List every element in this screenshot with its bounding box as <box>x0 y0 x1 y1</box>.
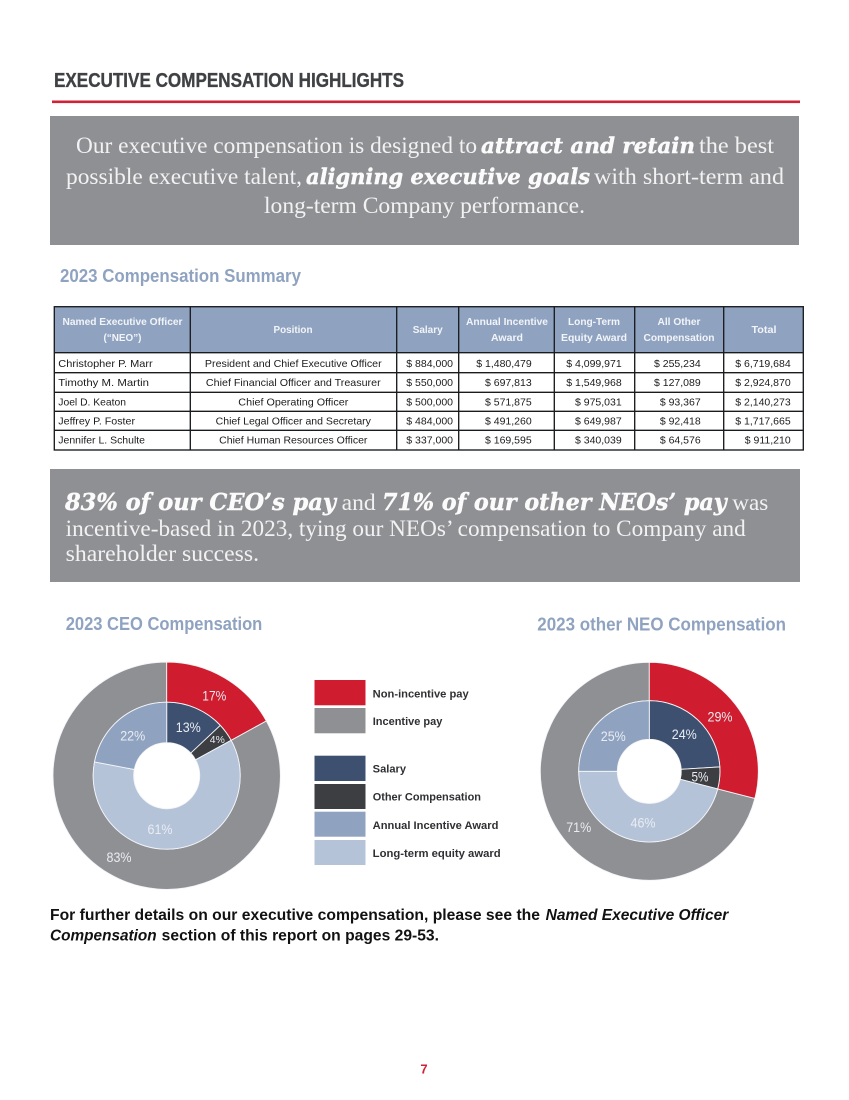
table header row: Long-Term <box>568 317 620 328</box>
NEO inner ring: annual incentive award 25% <box>579 701 649 771</box>
table row: Joel D. Keaton <box>58 396 791 408</box>
table row: Timothy M. Martin: $ 697,813 <box>485 377 532 389</box>
heading: CEO compensation: 2023 CEO Compensation <box>66 614 262 634</box>
table row: Jeffrey P. Foster: $ 484,000 <box>406 416 453 428</box>
table header row: Position <box>274 325 312 336</box>
legend: incentive pay: Incentive pay <box>373 716 443 728</box>
table row: Timothy M. Martin: $ 127,089 <box>654 377 701 389</box>
legend: non-incentive pay: Non-incentive pay <box>373 688 470 700</box>
banner: compensation philosophy: the best <box>699 133 775 158</box>
donut chart: CEO compensation <box>53 662 280 889</box>
footnote text <box>50 907 729 945</box>
CEO percentage labels: 83% <box>106 850 132 865</box>
footnote text: Compensation <box>50 928 157 945</box>
NEO inner ring: other compensation 5% <box>680 767 720 789</box>
NEO inner ring: long-term equity award 46% <box>579 771 718 842</box>
heading: other NEO compensation: 2023 other NEO Compensation <box>537 615 786 635</box>
table header row: Total <box>752 325 777 336</box>
table row: Christopher P. Marr <box>58 358 791 370</box>
table row: Christopher P. Marr: $ 6,719,684 <box>735 358 791 370</box>
table row: Jeffrey P. Foster <box>58 416 791 428</box>
table row: Timothy M. Martin: Chief Financial Officer and Treasurer <box>206 377 381 389</box>
table row: Jeffrey P. Foster: $ 491,260 <box>485 416 532 428</box>
table row: Christopher P. Marr: $ 4,099,971 <box>566 358 622 370</box>
table row: Jeffrey P. Foster: Chief Legal Officer and Secretary <box>216 416 372 428</box>
legend: non-incentive pay <box>314 680 470 705</box>
NEO percentage labels: 24% <box>672 727 697 742</box>
CEO inner ring: other compensation 4% <box>191 725 231 760</box>
donut chart: other NEO compensation <box>540 662 758 880</box>
banner: compensation philosophy: possible executive talent, <box>66 164 302 189</box>
banner: incentive-based pay: was <box>732 490 768 515</box>
CEO inner ring: annual incentive award 22% <box>94 702 167 770</box>
legend: salary: Salary <box>373 764 407 776</box>
page title: EXECUTIVE COMPENSATION HIGHLIGHTS <box>54 70 404 92</box>
CEO inner ring: long-term equity award 61% <box>93 740 240 849</box>
table row: Christopher P. Marr: President and Chief Executive Officer <box>205 358 382 370</box>
banner: compensation philosophy <box>50 116 799 245</box>
banner: incentive-based pay <box>50 469 800 582</box>
NEO outer ring: non-incentive pay 29% <box>649 662 758 798</box>
CEO percentage labels: 22% <box>120 728 145 744</box>
footnote text: section of this report on pages 29-53. <box>162 928 439 945</box>
table row: Joel D. Keaton: Chief Operating Officer <box>238 396 349 408</box>
CEO percentage labels: 61% <box>148 822 172 837</box>
table row: Jeffrey P. Foster: $ 92,418 <box>660 416 701 428</box>
CEO percentage labels: 13% <box>176 720 201 735</box>
legend: salary <box>314 756 407 781</box>
table header row: Award <box>491 333 523 344</box>
NEO inner ring: salary 24% <box>649 701 720 769</box>
heading: 2023 compensation summary: 2023 Compensation Summary <box>60 266 301 286</box>
table header row: Salary <box>413 325 443 336</box>
table row: Jeffrey P. Foster: Jeffrey P. Foster <box>58 416 136 428</box>
table header row: Annual Incentive <box>466 317 548 328</box>
NEO outer ring: incentive pay 71% <box>540 662 755 880</box>
table row: Joel D. Keaton: $ 571,875 <box>485 396 532 408</box>
table row: Christopher P. Marr: $ 1,480,479 <box>476 358 532 370</box>
table row: Timothy M. Martin: $ 2,924,870 <box>735 377 791 389</box>
footnote text: For further details on our executive compensation, please see the <box>50 907 540 924</box>
CEO inner ring: salary 13% <box>167 702 220 753</box>
table row: Jeffrey P. Foster: $ 1,717,665 <box>735 416 791 428</box>
table row: Timothy M. Martin: Timothy M. Martin <box>58 377 149 389</box>
table row: Joel D. Keaton: $ 500,000 <box>406 396 453 408</box>
table row: Joel D. Keaton: Joel D. Keaton <box>58 396 126 408</box>
legend: annual incentive award: Annual Incentive Award <box>373 820 498 832</box>
NEO percentage labels: 46% <box>630 816 656 830</box>
banner: incentive-based pay: and <box>342 490 376 515</box>
table row: Jennifer L. Schulte <box>58 434 791 446</box>
CEO percentage labels: 4% <box>210 734 225 746</box>
table header row: Named Executive Officer <box>62 317 183 328</box>
table row: Jennifer L. Schulte: $ 64,576 <box>660 434 701 446</box>
table row: Timothy M. Martin: $ 1,549,968 <box>566 377 622 389</box>
NEO percentage labels <box>566 710 732 835</box>
NEO percentage labels: 5% <box>692 770 708 784</box>
table row: Joel D. Keaton: $ 975,031 <box>575 396 622 408</box>
table row: Timothy M. Martin: $ 550,000 <box>406 377 453 389</box>
banner: compensation philosophy: attract and retain <box>481 133 695 158</box>
table row: Jennifer L. Schulte: $ 911,210 <box>745 434 791 446</box>
table row: Joel D. Keaton: $ 93,367 <box>660 396 701 408</box>
legend: incentive pay <box>314 708 443 733</box>
table row: Jennifer L. Schulte: Jennifer L. Schulte <box>58 434 145 446</box>
table header row: Compensation <box>644 333 714 344</box>
CEO percentage labels: 17% <box>202 688 226 704</box>
table row: Jeffrey P. Foster: $ 649,987 <box>575 416 622 428</box>
compensation summary table <box>54 306 804 450</box>
table header row: (“NEO”) <box>104 333 142 344</box>
CEO percentage labels <box>106 688 226 865</box>
banner: compensation philosophy: with short-term and <box>594 164 785 189</box>
table header row <box>54 306 804 352</box>
red title rule <box>52 100 800 103</box>
legend: long-term equity award: Long-term equity award <box>373 848 501 860</box>
table row: Christopher P. Marr: $ 884,000 <box>406 358 453 370</box>
table header row: Equity Award <box>561 333 627 344</box>
page number: 7 <box>420 1061 428 1076</box>
table row: Jennifer L. Schulte: $ 169,595 <box>485 434 532 446</box>
table row: Jennifer L. Schulte: Chief Human Resources Officer <box>219 434 368 446</box>
banner: incentive-based pay: shareholder success. <box>66 541 259 566</box>
NEO percentage labels: 25% <box>601 729 626 744</box>
CEO outer ring: incentive pay 83% <box>53 662 280 889</box>
legend: long-term equity award <box>314 840 501 865</box>
table row: Christopher P. Marr: Christopher P. Marr <box>58 358 153 370</box>
table row: Jennifer L. Schulte: $ 337,000 <box>406 434 453 446</box>
legend: other compensation <box>314 784 481 809</box>
banner: incentive-based pay: incentive-based in 2023, tying our NEOs’ compensation to Company and <box>66 516 746 541</box>
table row: Christopher P. Marr: $ 255,234 <box>654 358 701 370</box>
banner: incentive-based pay: 83% of our CEO’s pay <box>64 489 338 516</box>
banner: incentive-based pay: 71% of our other NEOs’ pay <box>382 489 728 516</box>
table row: Jennifer L. Schulte: $ 340,039 <box>575 434 622 446</box>
table header row: All Other <box>658 317 701 328</box>
legend: other compensation: Other Compensation <box>373 792 481 804</box>
banner: compensation philosophy: Our executive compensation is designed to <box>76 133 477 158</box>
table row: Timothy M. Martin <box>58 377 791 389</box>
table row: Joel D. Keaton: $ 2,140,273 <box>735 396 791 408</box>
CEO outer ring: non-incentive pay 17% <box>167 662 266 740</box>
NEO percentage labels: 71% <box>566 820 591 835</box>
banner: compensation philosophy: long-term Company performance. <box>264 193 585 218</box>
legend <box>314 680 501 865</box>
footnote text: Named Executive Officer <box>546 907 729 924</box>
NEO percentage labels: 29% <box>708 710 732 724</box>
legend: annual incentive award <box>314 812 498 837</box>
banner: compensation philosophy: aligning executive goals <box>306 164 590 189</box>
